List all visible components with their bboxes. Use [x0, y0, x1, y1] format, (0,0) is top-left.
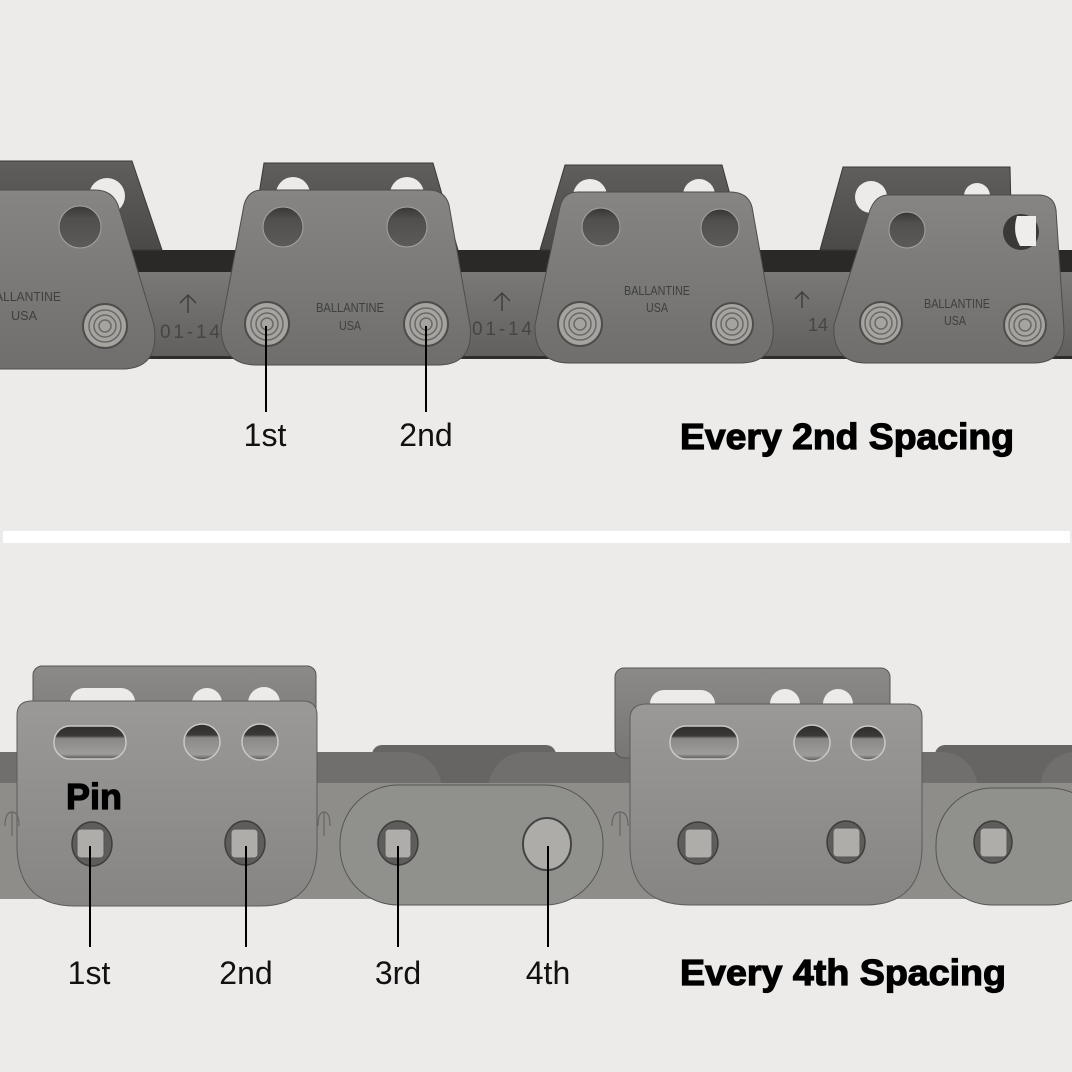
stamped text: 01-14 [472, 319, 532, 340]
stamped text [0, 283, 990, 343]
stamped text: USA [339, 318, 361, 333]
stamped text: 01-14 [160, 322, 220, 343]
stamped arcs [5, 812, 628, 836]
stamped text: BALLANTINE [624, 283, 690, 298]
stamped text: 14 [808, 315, 828, 335]
title: every 4th spacing: Every 4th Spacing [680, 952, 1006, 993]
front plate 1 [0, 190, 155, 369]
square pin heads [77, 828, 1007, 858]
lower link band [0, 783, 1072, 899]
front plate 2 [221, 190, 470, 365]
round pin [523, 818, 571, 870]
label: 4th: 4th [526, 955, 570, 991]
label: 2nd: 2nd [399, 417, 453, 453]
stamped text: BALLANTINE [924, 296, 990, 311]
upper link strips [0, 752, 1072, 786]
label: 1st: 1st [244, 417, 286, 453]
plate holes [54, 724, 885, 761]
chain: every 2nd spacing [0, 161, 1072, 369]
pointer lines bottom [90, 846, 548, 947]
rear attachment plate 2 [615, 668, 890, 758]
upper plate holes [59, 206, 925, 248]
front plate 3 [535, 192, 773, 363]
front plate 2 [630, 704, 922, 905]
rear attachment plate 1 [33, 666, 316, 756]
rear links [372, 745, 556, 795]
front plate 4 [834, 195, 1064, 363]
label: 1st: 1st [68, 955, 110, 991]
stamped text: USA [646, 300, 668, 315]
pins [72, 821, 1012, 866]
oval link [340, 785, 603, 905]
front plate 1 [17, 701, 317, 906]
rear plate holes [70, 687, 853, 720]
title: every 2nd spacing: Every 2nd Spacing [680, 416, 1014, 457]
label: 2nd: 2nd [219, 955, 273, 991]
stamped text: USA [11, 308, 37, 323]
pointer lines top [266, 326, 426, 412]
stamped text: BALLANTINE [316, 300, 384, 315]
label: 3rd: 3rd [375, 955, 421, 991]
stamped arrows [180, 292, 809, 313]
stamped text: USA [944, 313, 966, 328]
label: pin: Pin [66, 776, 122, 817]
rear plate holes [89, 177, 990, 214]
open plate hole [1003, 214, 1039, 250]
pins [83, 302, 1046, 348]
lower link band [0, 272, 1072, 358]
rear attachment plates [0, 161, 1012, 250]
rear channel [0, 250, 1072, 274]
oval link right [936, 788, 1072, 905]
divider band [3, 531, 1070, 543]
pin rings [89, 307, 1041, 342]
chain: every 4th spacing [0, 666, 1072, 906]
